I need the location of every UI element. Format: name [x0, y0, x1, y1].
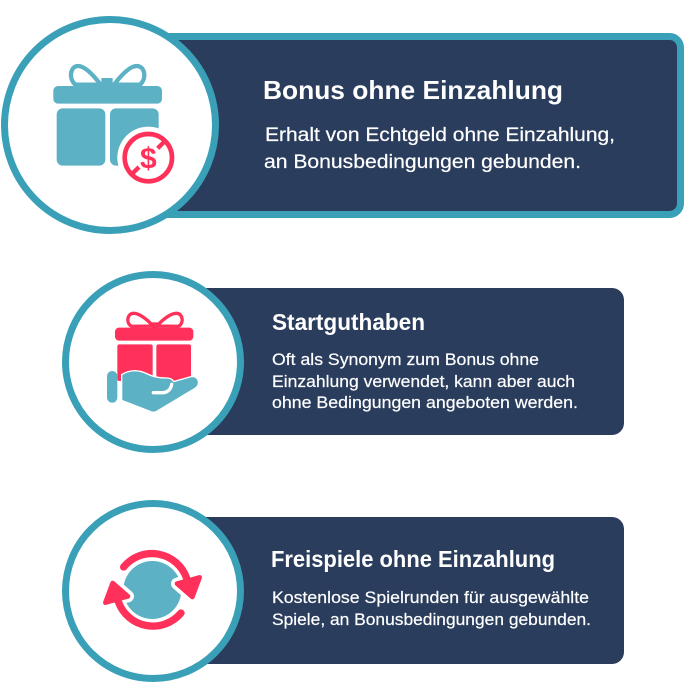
text block: Startguthaben description: Einzahlung verwendet, kann aber auch	[272, 372, 575, 391]
text block: Bonus ohne Einzahlung description: Erhalt von Echtgeld ohne Einzahlung,	[265, 125, 615, 146]
heading: Freispiele ohne Einzahlung: Freispiele ohne Einzahlung	[271, 546, 555, 572]
text block: Startguthaben description: Oft als Synonym zum Bonus ohne	[272, 350, 539, 369]
panel: Freispiele ohne Einzahlung	[153, 517, 624, 664]
text block: Freispiele description: Spiele, an Bonusbedingungen gebunden.	[272, 610, 591, 629]
circle: refresh badge	[66, 504, 240, 678]
icon: circular arrows around coin	[105, 554, 200, 626]
icon: gift on open hand	[107, 313, 198, 412]
text block: Startguthaben description: ohne Bedingungen angeboten werden.	[272, 393, 578, 412]
text block: Bonus ohne Einzahlung description: an Bonusbedingungen gebunden.	[264, 152, 581, 173]
panel: Bonus ohne Einzahlung	[110, 36, 680, 214]
text block: Freispiele description: Kostenlose Spielrunden für ausgewählte	[272, 588, 589, 607]
circle: gift in hand badge	[66, 274, 240, 450]
text block: Bonus ohne Einzahlung description	[264, 125, 615, 173]
icon: gift with crossed dollar	[53, 66, 179, 189]
circle: gift icon badge	[4, 20, 216, 230]
panel: Startguthaben	[153, 288, 624, 435]
heading: Startguthaben: Startguthaben	[272, 309, 425, 335]
icon: gift with crossed dollar: $	[140, 142, 157, 175]
text block: Startguthaben description	[272, 350, 578, 412]
text block: Freispiele description	[272, 588, 591, 629]
heading: Bonus ohne Einzahlung: Bonus ohne Einzahlung	[263, 75, 563, 105]
